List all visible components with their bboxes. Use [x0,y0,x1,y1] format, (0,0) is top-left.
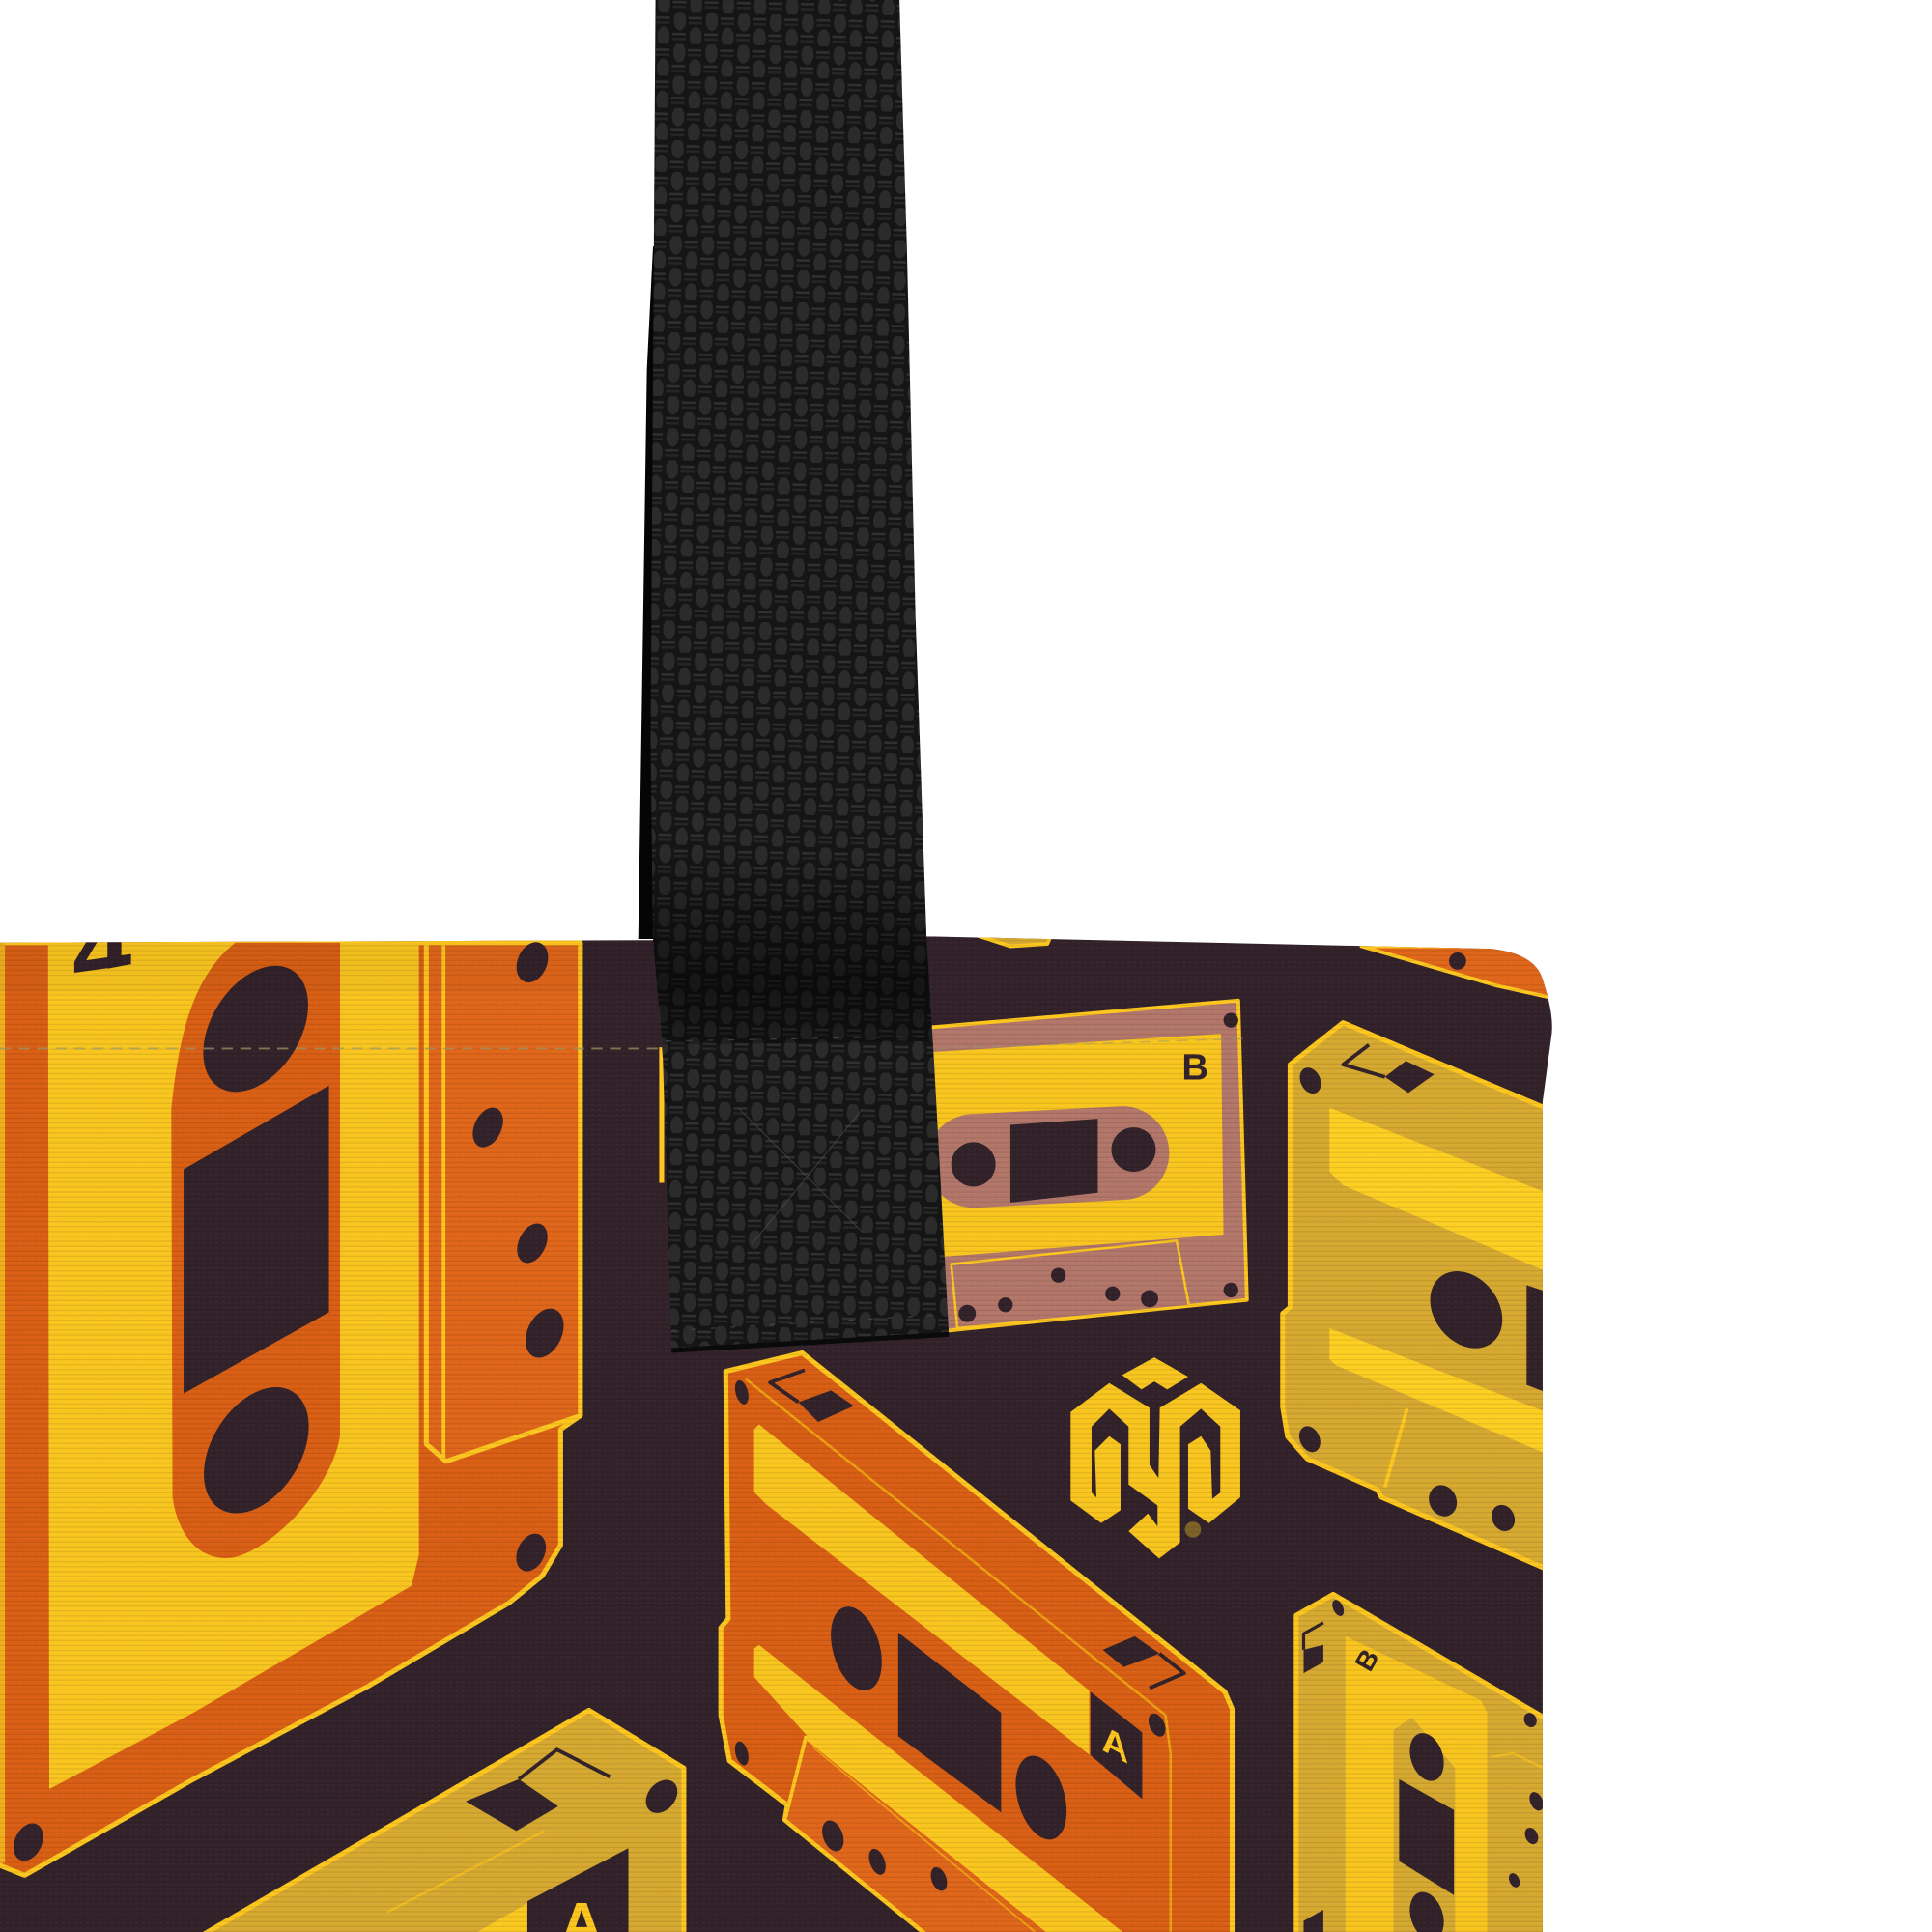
strap fold shading [653,850,933,1045]
strap front [650,0,949,1350]
cassette: gold right [1283,1023,1565,1577]
cassette fragment: top right orange [1361,947,1552,998]
cassette: rose side B [899,1001,1247,1336]
fabric texture and stitching [0,924,1565,1932]
cassette: gold bottom left [203,1710,684,1932]
cassette: orange centre side A: A [1102,1717,1128,1773]
cassette fragment: top edge [978,937,1051,949]
cassette: rose side B: B [1181,1046,1208,1088]
logo [1070,1357,1240,1558]
strap stitching [666,1037,949,1350]
strap back edge [639,246,658,939]
cassette: gold bottom right side B [1296,1595,1552,1932]
logo registered mark [1185,1521,1201,1538]
tote bag body [0,884,1565,1932]
cassette: orange centre side A [721,1353,1233,1932]
fabric base [0,924,1565,1932]
cassette: large orange [0,884,581,1875]
black strap [639,0,949,1350]
cassette: large orange: 4 [72,884,131,1010]
logo monogram [1070,1383,1240,1558]
cassette: gold bottom right side B: B [1350,1644,1385,1676]
logo top chevron [1122,1357,1188,1389]
